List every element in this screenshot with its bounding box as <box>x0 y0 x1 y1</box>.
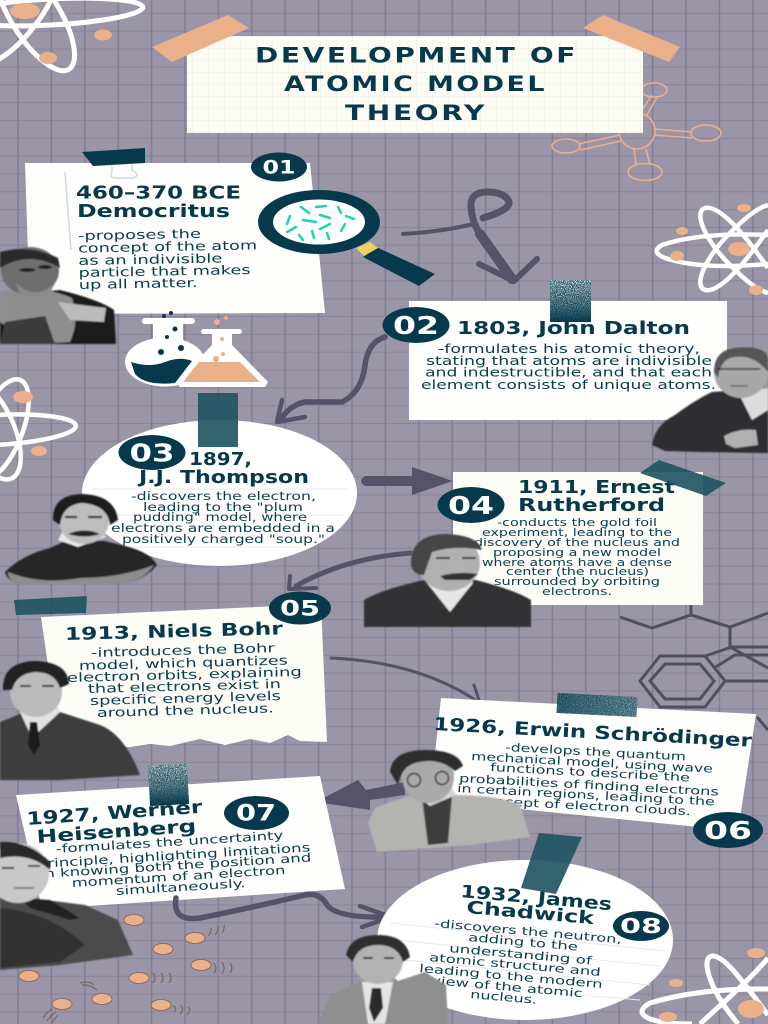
body text: simultaneously. <box>115 876 246 898</box>
body text: concept of the atom <box>78 237 257 255</box>
body text: probabilities of finding electrons <box>459 772 719 799</box>
body text: experiment, leading to the <box>482 527 672 539</box>
heading: 460–370 BCE <box>76 184 241 204</box>
badge 06: 06 <box>704 816 752 845</box>
body text: surrounded by orbiting <box>494 576 660 588</box>
body text: atomic structure and <box>429 951 601 979</box>
tape <box>14 596 87 615</box>
heading: 1911, Ernest <box>518 478 675 498</box>
panel: Heisenberg card <box>16 764 345 907</box>
title text <box>255 44 578 126</box>
heading: 1927, Werner <box>26 797 203 830</box>
arrow: Dalton to Thompson <box>277 337 385 422</box>
title text: DEVELOPMENT OF <box>255 44 578 68</box>
heading: 1897, <box>189 450 252 470</box>
panel: Democritus card <box>25 148 325 314</box>
tape <box>640 460 726 496</box>
body text: mechanical model, using wave <box>471 750 713 776</box>
badge 04 <box>438 487 504 523</box>
badge 07 <box>224 796 289 830</box>
body text: -formulates the uncertainty <box>55 828 284 856</box>
arrow: Heisenberg to Chadwick <box>176 894 391 927</box>
icon: atom right <box>657 204 768 295</box>
icon: hexagon molecule <box>620 604 768 730</box>
heading: 1803, John Dalton <box>457 319 690 339</box>
portrait: Heisenberg <box>0 842 133 970</box>
badge 08 <box>613 911 669 941</box>
portrait: Rutherford <box>364 534 531 627</box>
badge 06 <box>693 812 763 848</box>
icon: outlined molecule <box>550 83 721 180</box>
tape: right <box>583 15 680 62</box>
body text: stating that atoms are indivisible <box>426 354 712 368</box>
body text: -discovers the neutron, <box>434 917 622 946</box>
body text: -introduces the Bohr <box>91 640 276 660</box>
badge 01: 01 <box>262 158 296 178</box>
body text: electrons. <box>542 586 612 598</box>
heading: 1932, James <box>460 882 613 915</box>
body text <box>474 517 680 598</box>
body text: view of the atomic <box>431 974 583 1000</box>
panel: Thompson circle: J.J. Thompson <box>138 468 309 488</box>
badge 03 <box>118 435 186 470</box>
tape noise <box>550 280 591 322</box>
body text: adding to the <box>468 931 579 954</box>
body text: around the nucleus. <box>97 700 274 720</box>
arrow: Rutherford to Bohr <box>289 553 411 589</box>
body text: electron orbits, explaining <box>67 664 302 685</box>
tape <box>198 393 238 447</box>
paperclip <box>111 162 137 178</box>
panel: Democritus card: Democritus <box>77 202 230 222</box>
panel: Dalton card <box>409 280 727 420</box>
panel: Rutherford card: Rutherford <box>518 496 665 516</box>
arrow: Thompson to Rutherford <box>361 467 453 495</box>
panel: Chadwick circle <box>377 833 673 1020</box>
heading: 1926, Erwin Schrödinger <box>433 714 753 752</box>
badge 08: 08 <box>620 914 662 938</box>
portrait: Thompson <box>5 494 157 584</box>
panel: Thompson circle <box>82 393 357 566</box>
icon: atom bottom right <box>642 948 768 1024</box>
body text: specific energy levels <box>90 688 281 708</box>
body text: discovery of the nucleus and <box>474 537 680 549</box>
panel: Bohr card <box>14 596 327 748</box>
icon: atom top left <box>0 0 144 82</box>
body text: where atoms have a dense <box>482 557 672 569</box>
body text: proposing a new model <box>493 547 661 559</box>
body text: -discovers the electron, <box>131 490 316 503</box>
body text: up all matter. <box>79 275 198 292</box>
body text: particle that makes <box>78 262 251 280</box>
panel: Schrodinger card <box>430 693 756 831</box>
body text <box>67 640 302 720</box>
portrait: Schrodinger <box>368 750 530 852</box>
body text: concept of electron clouds. <box>476 794 691 818</box>
portrait: Dalton <box>652 346 768 453</box>
body text: positively charged "soup." <box>122 533 325 546</box>
body text: and indestructible, and that each <box>425 366 712 380</box>
body text <box>457 741 719 818</box>
body text: -conducts the gold foil <box>497 517 657 529</box>
body text: nucleus. <box>470 988 538 1007</box>
tape <box>521 833 582 894</box>
portrait: Chadwick <box>318 935 448 1024</box>
body text: principle, highlighting limitations <box>36 840 311 871</box>
body text: momentum of an electron <box>71 863 286 890</box>
panel: title <box>152 15 680 133</box>
panel: Chadwick circle: Chadwick <box>466 898 595 929</box>
portrait: Bohr <box>0 661 140 780</box>
panel: Rutherford card <box>453 460 726 605</box>
badge 04: 04 <box>448 491 494 520</box>
badge 05 <box>269 592 331 624</box>
body text: in certain regions, leading to the <box>457 782 715 809</box>
title text: ATOMIC MODEL <box>284 72 547 97</box>
tape noise <box>557 693 637 717</box>
body text <box>78 225 258 292</box>
arrow: Bohr to Schrodinger <box>331 658 480 703</box>
body text: -formulates his atomic theory, <box>438 342 700 356</box>
title text: THEORY <box>345 101 487 126</box>
badge 02: 02 <box>393 311 439 340</box>
badge 02 <box>382 307 450 343</box>
body text: understanding of <box>449 942 594 968</box>
badge 03: 03 <box>130 438 174 468</box>
body text: that electrons exist in <box>88 676 281 696</box>
panel: Heisenberg card: Heisenberg <box>36 816 197 848</box>
heading: 1913, Niels Bohr <box>65 619 284 645</box>
badge 05: 05 <box>280 596 320 620</box>
icon: flasks <box>125 311 268 387</box>
icon: atom left <box>0 372 77 488</box>
body text: model, which quantizes <box>79 653 288 673</box>
tape: left <box>152 15 249 62</box>
body text: leading to the modern <box>419 962 603 991</box>
body text: -proposes the <box>78 226 201 243</box>
body text: pudding" model, where <box>133 511 307 524</box>
tape noise <box>148 764 189 806</box>
body text: in knowing both the position and <box>39 850 312 881</box>
tape clip <box>82 148 145 166</box>
body text: functions to describe the <box>490 761 690 784</box>
portrait: Democritus <box>0 247 116 344</box>
decorative dots with waves <box>19 914 232 1023</box>
icon: magnifying glass <box>258 190 435 286</box>
body text <box>421 342 716 392</box>
body text <box>419 917 622 1007</box>
arrow: Schrodinger to Heisenberg <box>316 780 405 810</box>
body text: leading to the "plum <box>143 501 303 514</box>
badge 01 <box>251 152 307 182</box>
badge 07: 07 <box>236 802 276 826</box>
body text <box>36 828 312 898</box>
body text: electrons are embedded in a <box>111 522 335 535</box>
body text <box>111 490 335 546</box>
body text: element consists of unique atoms. <box>421 378 716 392</box>
arrow: Democritus to Dalton <box>403 192 537 281</box>
body text: -develops the quantum <box>505 741 686 763</box>
body text: as an indivisible <box>78 250 223 268</box>
body text: center (the nucleus) <box>506 566 649 578</box>
